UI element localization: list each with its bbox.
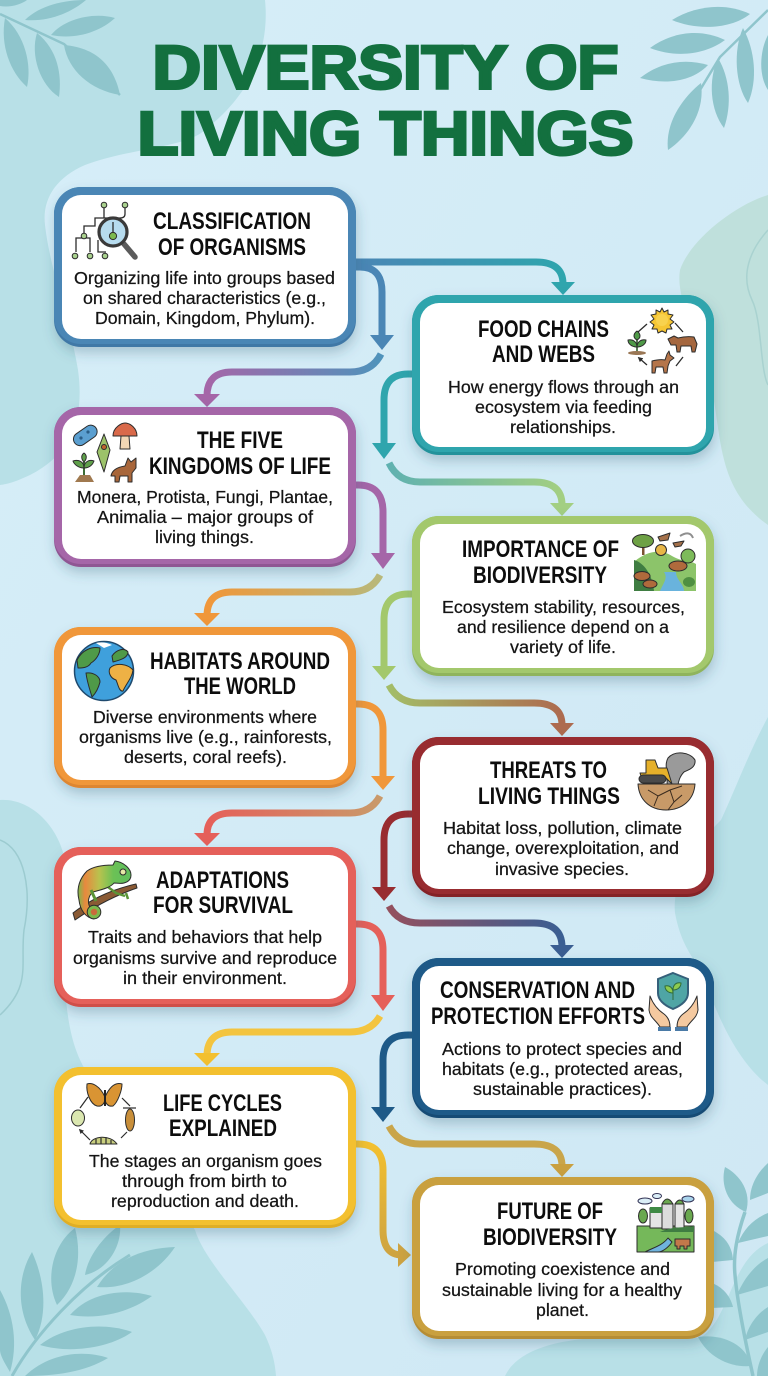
body text: reproduction and death. [111, 1191, 299, 1211]
icon: globe [74, 642, 134, 700]
heading: BIODIVERSITY [473, 562, 607, 589]
icon: chameleon on branch [73, 861, 137, 920]
panel: future of biodiversity [412, 1177, 714, 1339]
arrow: to five kingdoms [194, 354, 381, 407]
body text: Monera, Protista, Fungi, Plantae, [77, 487, 333, 507]
body text [448, 377, 679, 437]
body text [89, 1151, 322, 1211]
heading [153, 208, 311, 261]
body text: Ecosystem stability, resources, [442, 597, 685, 617]
heading: IMPORTANCE OF [462, 536, 619, 563]
body text: Animalia – major groups of [97, 507, 313, 527]
body text: planet. [536, 1300, 589, 1320]
heading: FUTURE OF [497, 1198, 603, 1225]
arrow: food chains downward [372, 374, 412, 459]
body text: sustainable practices). [473, 1079, 652, 1099]
heading: FOOD CHAINS [478, 316, 609, 343]
card frame [54, 187, 356, 347]
leaves: bottom left [0, 1225, 175, 1376]
heading [478, 316, 609, 368]
body text: on shared characteristics (e.g., [83, 288, 326, 308]
body text: Habitat loss, pollution, climate [443, 818, 682, 838]
heading: BIODIVERSITY [483, 1224, 617, 1251]
connector arrows [194, 262, 575, 1267]
card frame [54, 1067, 356, 1228]
heading: THE WORLD [184, 673, 296, 700]
icon: shield with plant and hands [649, 973, 698, 1031]
panel: habitats around the world [54, 627, 356, 788]
heading [483, 1198, 617, 1251]
body text: through from birth to [122, 1171, 287, 1191]
card frame [54, 627, 356, 788]
icon: food web cycle [628, 308, 697, 373]
card frame [412, 737, 714, 897]
body text: organisms live (e.g., rainforests, [79, 727, 332, 747]
card frame [412, 1177, 714, 1339]
arrow: habitats downward [356, 704, 395, 790]
heading [149, 427, 331, 480]
panel: life cycles explained [54, 1067, 356, 1228]
arrow: five kingdoms downward [356, 485, 395, 569]
leaves: top right [640, 7, 768, 150]
body text: Diverse environments where [93, 707, 317, 727]
heading: THREATS TO [490, 757, 607, 784]
icon: green city [637, 1194, 694, 1252]
icon: five kingdoms [71, 423, 137, 482]
body text [73, 927, 337, 988]
arrow: to life cycles [194, 1016, 380, 1066]
heading [431, 977, 645, 1030]
heading [462, 536, 619, 589]
body text [79, 707, 332, 767]
title: DIVERSITY OF [152, 34, 618, 102]
body text: Organizing life into groups based [74, 268, 335, 288]
body text: ecosystem via feeding [475, 397, 652, 417]
heading: AND WEBS [492, 341, 595, 368]
panel: threats to living things [412, 737, 714, 897]
panel: food chains and webs [412, 295, 714, 455]
body text: Domain, Kingdom, Phylum). [95, 308, 315, 328]
body text: Traits and behaviors that help [88, 927, 322, 947]
arrow: conservation downward [371, 1035, 412, 1122]
arrow: importance downward [372, 594, 412, 680]
body text [74, 268, 335, 328]
heading: KINGDOMS OF LIFE [149, 453, 331, 480]
arrow: threats downward [372, 814, 412, 901]
icon: bulldozer, smoke and cracked earth [638, 753, 695, 810]
body text: Promoting coexistence and [455, 1259, 670, 1279]
body text: variety of life. [510, 637, 616, 657]
body text: organisms survive and reproduce [73, 948, 337, 968]
arrow: to habitats [194, 575, 380, 626]
body text: How energy flows through an [448, 377, 679, 397]
body text: deserts, coral reefs). [124, 747, 287, 767]
body text: sustainable living for a healthy [442, 1280, 682, 1300]
heading [153, 867, 293, 919]
card frame [54, 847, 356, 1007]
heading: OF ORGANISMS [158, 234, 306, 261]
arrow: to importance of biodiversity [389, 463, 574, 516]
arrow: adaptations downward [356, 924, 395, 1011]
heading: PROTECTION EFFORTS [431, 1003, 645, 1030]
arrow: to adaptations [194, 796, 380, 846]
heading: CLASSIFICATION [153, 208, 311, 235]
panel: importance of biodiversity [412, 516, 714, 676]
body text: habitats (e.g., protected areas, [442, 1059, 683, 1079]
leaves: bottom right [698, 1163, 768, 1376]
panel: conservation and protection efforts [412, 958, 714, 1118]
heading [478, 757, 620, 810]
arrow: classification to food chains [356, 262, 575, 295]
heading: HABITATS AROUND [150, 648, 330, 675]
heading: ADAPTATIONS [156, 867, 289, 894]
heading: EXPLAINED [169, 1115, 277, 1142]
arrow: life cycles to future [356, 1144, 411, 1267]
card frame [412, 295, 714, 455]
body text: The stages an organism goes [89, 1151, 322, 1171]
body text [77, 487, 333, 547]
body text [443, 818, 682, 879]
title: LIVING THINGS [138, 100, 634, 168]
body text: living things. [155, 527, 254, 547]
body text: invasive species. [495, 859, 629, 879]
body text [442, 597, 685, 657]
card frame [412, 958, 714, 1118]
icon: butterfly life cycle [72, 1084, 136, 1144]
body text: relationships. [510, 417, 616, 437]
arrow: to threats [389, 685, 574, 736]
arrow: to conservation [389, 906, 574, 958]
heading: LIFE CYCLES [163, 1090, 282, 1117]
arrow: to future of biodiversity [389, 1126, 574, 1177]
body text: Actions to protect species and [442, 1039, 682, 1059]
panel: classification of organisms [54, 187, 356, 347]
heading: THE FIVE [197, 427, 283, 454]
heading: FOR SURVIVAL [153, 892, 293, 919]
arrow: classification downward [356, 267, 394, 350]
heading [150, 648, 330, 700]
title [138, 34, 634, 168]
card frame [412, 516, 714, 676]
panel: the five kingdoms of life [54, 407, 356, 567]
body text: and resilience depend on a [457, 617, 669, 637]
body text: change, overexploitation, and [447, 838, 679, 858]
body text [442, 1039, 683, 1099]
body text [442, 1259, 682, 1320]
card frame [54, 407, 356, 567]
leaves: top left [0, 0, 120, 97]
icon: classification tree and magnifier [72, 202, 135, 259]
heading: CONSERVATION AND [440, 977, 635, 1004]
icon: ecosystem scene [632, 533, 696, 591]
heading: LIVING THINGS [478, 783, 620, 810]
heading [163, 1090, 282, 1142]
panel: adaptations for survival [54, 847, 356, 1007]
body text: in their environment. [123, 968, 287, 988]
